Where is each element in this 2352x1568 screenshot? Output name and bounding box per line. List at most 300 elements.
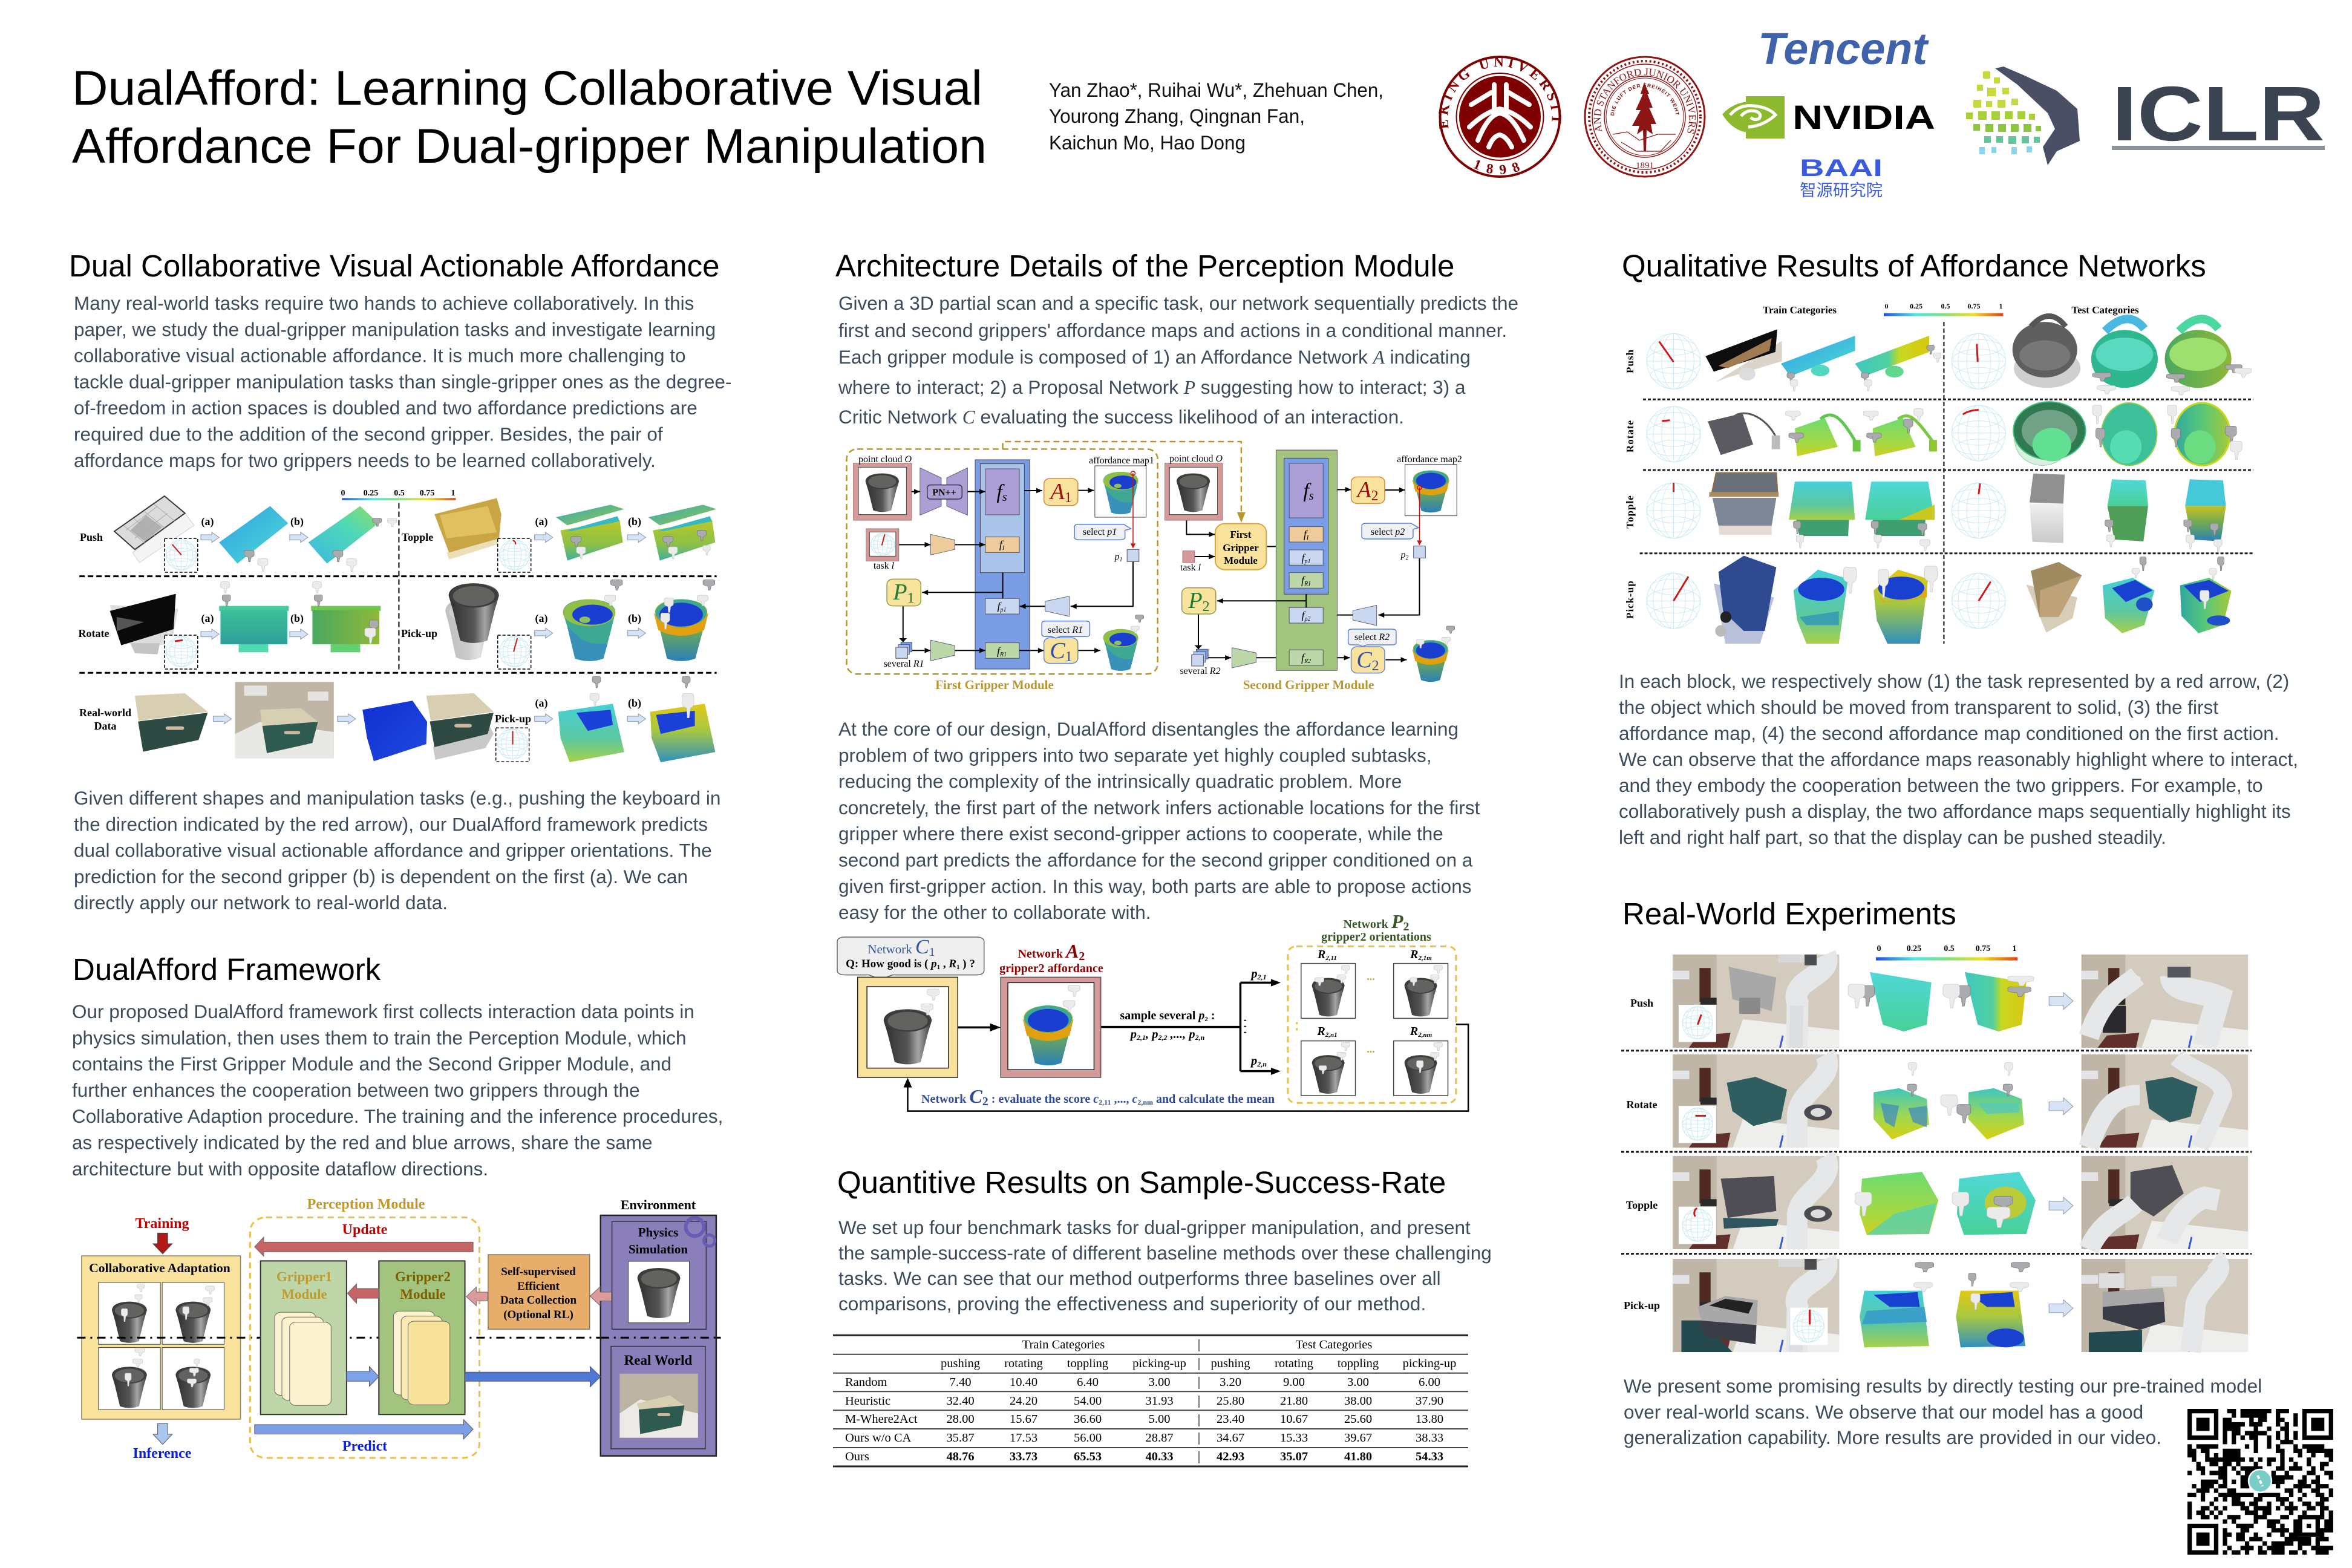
labels: architecture: task l	[1180, 563, 1201, 573]
table: results: 17.53	[1010, 1431, 1037, 1445]
panel: point cloud input second	[1165, 463, 1223, 520]
object: push row train	[1705, 329, 1782, 382]
row labels: (a)	[535, 612, 548, 625]
authors: Yan Zhao*, Ruihai Wu*, Zhehuan Chen,	[1049, 79, 1383, 101]
panel: first gripper result	[858, 977, 958, 1077]
labels: adaptation: R	[1318, 948, 1325, 961]
diagram labels: Environment	[621, 1197, 696, 1212]
labels: architecture: affordance map2	[1397, 454, 1462, 465]
labels: architecture: f	[1301, 552, 1305, 564]
object: router	[1708, 413, 1780, 455]
callout: select p1	[1074, 524, 1131, 540]
labels: architecture: p1	[1000, 607, 1007, 613]
arrow: predict	[255, 1420, 473, 1439]
labels: adaptation: 2,11	[1325, 955, 1337, 962]
diagram labels: Collaborative Adaptation	[89, 1261, 230, 1275]
labels: architecture: 2	[1371, 488, 1379, 504]
labels: architecture: point cloud O	[858, 454, 912, 465]
labels: adaptation: and calculate the mean	[1153, 1093, 1275, 1106]
labels: real-world: 1	[2012, 944, 2017, 953]
panel: environment	[601, 1215, 720, 1456]
heading: dual collaborative visual actionable affordance: Dual Collaborative Visual Actionable Affordance	[69, 249, 719, 283]
labels: architecture: Second Gripper Module	[1243, 678, 1374, 692]
table: results: 40.33	[1145, 1450, 1174, 1463]
labels: adaptation: 2	[982, 1095, 988, 1108]
diagram labels: Real World	[624, 1353, 693, 1368]
diagram labels: Training	[136, 1216, 189, 1232]
labels: adaptation: R	[1410, 948, 1419, 961]
table: results: Test Categories	[1296, 1338, 1372, 1351]
logo: Stanford University: DIE LUFT DER FREIHEIT WEHT	[1610, 83, 1679, 116]
photo: lab scene	[235, 682, 334, 758]
labels: architecture: Gripper	[1223, 542, 1259, 554]
text block: framework output: Given different shapes and manipulation tasks (e.g., pushing the keyboard in	[74, 787, 720, 809]
labels: architecture: C	[1050, 638, 1065, 664]
panel: point cloud input	[854, 463, 912, 520]
figure: qualitative results	[1624, 302, 2253, 644]
icon: storage box	[434, 498, 503, 560]
table: results: Ours	[845, 1450, 869, 1463]
labels: qualitative: Pick-up	[1624, 580, 1636, 619]
labels: architecture: f	[999, 538, 1002, 550]
authors: Kaichun Mo, Hao Dong	[1049, 132, 1246, 154]
labels: adaptation: ) ?	[960, 958, 975, 970]
table: results: Random	[845, 1376, 887, 1389]
text block: qualitative: We can observe that the affordance maps reasonably highlight where to interact,	[1619, 748, 2298, 770]
diagram labels: Predict	[342, 1439, 387, 1454]
QR code	[2187, 1411, 2333, 1552]
text block: framework output: prediction for the second gripper (b) is dependent on the first (a). We can	[74, 866, 688, 887]
labels: adaptation: Network A	[1018, 940, 1079, 962]
table: results: pushing	[1211, 1357, 1250, 1370]
arrow: predict small	[347, 1367, 379, 1387]
labels: adaptation: 2,nm	[1137, 1098, 1153, 1106]
table: results: 6.40	[1077, 1376, 1099, 1389]
labels: adaptation: : evaluate the score	[988, 1093, 1093, 1106]
text block: architecture: where to interact; 2) a Proposal Network P suggesting how to interact; 3) a	[838, 376, 1466, 398]
labels: adaptation: , p	[1145, 1028, 1158, 1041]
labels: adaptation: 2,n1	[1325, 1031, 1338, 1039]
panel: task input	[866, 529, 899, 561]
text block: framework: Collaborative Adaption procedure. The training and the inference procedures,	[72, 1105, 723, 1127]
labels: real-world: 0.75	[1976, 944, 1990, 953]
table: results: 37.90	[1416, 1394, 1443, 1408]
table: results: 42.93	[1217, 1450, 1244, 1463]
table: results: 54.00	[1074, 1394, 1102, 1408]
table: results: 38.00	[1344, 1394, 1372, 1408]
labels: qualitative	[1624, 302, 2139, 619]
labels: adaptation: c	[1132, 1093, 1137, 1106]
table: results: toppling	[1338, 1357, 1379, 1370]
labels: architecture: select p2	[1371, 527, 1405, 537]
labels: architecture: f	[997, 645, 1000, 657]
panel: C2	[1351, 647, 1385, 673]
labels: architecture: 1	[1119, 557, 1123, 563]
labels: qualitative: 0	[1885, 302, 1889, 310]
labels: architecture: f	[1303, 480, 1309, 502]
logo: Tencent: Tencent	[1758, 24, 1929, 74]
icon: box with transparent	[426, 693, 494, 760]
labels: architecture: First	[1230, 529, 1252, 540]
text block: introduction	[74, 292, 731, 471]
text block: framework output: directly apply our network to real-world data.	[74, 892, 448, 913]
table: results: 23.40	[1217, 1413, 1244, 1426]
table: results: 13.80	[1416, 1413, 1443, 1426]
table: results	[833, 1335, 1468, 1466]
labels: architecture: I	[1002, 545, 1005, 552]
labels: real-world: Pick-up	[1624, 1299, 1660, 1312]
text block: introduction: paper, we study the dual-gripper manipulation tasks and investigate learning	[74, 318, 716, 340]
labels: architecture: 1	[1065, 490, 1072, 506]
object: pc tower	[2030, 474, 2065, 543]
logo: BAAI: BAAI	[1800, 155, 1883, 181]
row labels: (a)	[201, 612, 214, 625]
table: results: Train Categories	[1022, 1338, 1105, 1351]
labels: qualitative: 1	[1999, 302, 2002, 310]
labels: qualitative: Test Categories	[2071, 304, 2139, 316]
panel: P1	[887, 579, 921, 606]
labels: adaptation: 2	[1079, 950, 1085, 963]
labels: adaptation: sample several p	[1120, 1009, 1204, 1022]
table: results: rotating	[1004, 1357, 1043, 1370]
heading: qualitative results: Qualitative Results of Affordance Networks	[1622, 249, 2206, 283]
labels: adaptation: p	[1131, 1028, 1137, 1041]
table: results: 34.67	[1217, 1431, 1244, 1445]
arrow: update	[255, 1237, 473, 1256]
table: results: 3.00	[1347, 1376, 1369, 1389]
labels: adaptation: 2,1m	[1418, 955, 1432, 962]
callout: network C1	[837, 937, 984, 979]
labels: architecture: R1	[999, 652, 1007, 658]
labels: architecture: s	[1309, 489, 1314, 503]
text block: introduction: tackle dual-gripper manipulation tasks than single-gripper ones as the degree-	[74, 371, 731, 393]
table: results: rotating	[1275, 1357, 1313, 1370]
text block: framework	[72, 1001, 723, 1180]
figure: framework diagram	[77, 1197, 720, 1462]
labels: real-world	[1624, 944, 2017, 1312]
labels: architecture: R1	[1304, 581, 1311, 587]
labels: architecture: First Gripper Module	[935, 678, 1054, 692]
labels: architecture: 1	[907, 590, 915, 606]
text block: design: gripper where there exist second-gripper actions to cooperate, while the	[838, 823, 1443, 844]
figure: collaborative adaptation procedure	[837, 910, 1468, 1111]
labels: adaptation: 1	[929, 946, 935, 959]
row labels: (a)	[535, 515, 548, 528]
labels: architecture: p	[1114, 552, 1119, 562]
callout: select R2	[1348, 629, 1396, 647]
labels: architecture: I	[1306, 535, 1309, 541]
heading: quantitative results: Quantitive Results on Sample-Success-Rate	[837, 1165, 1446, 1200]
labels: architecture: A	[1357, 477, 1371, 503]
text block: architecture: Each gripper module is composed of 1) an Affordance Network A indicating	[838, 346, 1471, 368]
table: results: 15.67	[1010, 1413, 1037, 1426]
text block: framework: as respectively indicated by the red and blue arrows, share the same	[72, 1131, 653, 1153]
logo: Stanford University: 1891	[1636, 161, 1654, 171]
colorbar labels	[341, 489, 455, 498]
row labels: Data	[94, 720, 116, 732]
table: results: Ours w/o CA	[845, 1431, 912, 1445]
labels: real-world: 0	[1877, 944, 1881, 953]
text block: qualitative: In each block, we respectively show (1) the task represented by a red arrow, (2)	[1619, 670, 2289, 692]
figure: real-world experiments	[1621, 944, 2252, 1352]
labels: architecture: p2	[1304, 616, 1311, 622]
table: results: 10.40	[1010, 1376, 1037, 1389]
labels: real-world: 0.25	[1907, 944, 1921, 953]
diagram labels: Efficient	[517, 1280, 560, 1293]
diagram labels: Gripper2	[395, 1269, 451, 1284]
labels: architecture: f	[1304, 528, 1307, 540]
labels: adaptation: p	[1251, 967, 1258, 981]
table: results: 36.60	[1074, 1413, 1102, 1426]
labels: real-world: Rotate	[1627, 1099, 1657, 1111]
arrow: predict to world	[465, 1367, 601, 1387]
panel: gripper 2	[379, 1261, 465, 1414]
panel: second gripper encoder	[1276, 450, 1337, 670]
labels: adaptation: gripper2 orientations	[1321, 930, 1431, 944]
table: results: 5.00	[1149, 1413, 1170, 1426]
text block: introduction: collaborative visual actionable affordance. It is much more challenging to	[74, 345, 686, 367]
labels: qualitative: Train Categories	[1763, 304, 1837, 316]
labels: adaptation: 2,1	[1136, 1033, 1146, 1042]
text block: qualitative: the object which should be moved from transparent to solid, (3) the first	[1619, 696, 2218, 718]
heading: DualAfford framework: DualAfford Framework	[73, 952, 381, 987]
text block: quantitative: the sample-success-rate of different baseline methods over these challenging	[838, 1242, 1492, 1264]
labels: architecture: affordance map1	[1089, 456, 1154, 466]
authors	[1049, 79, 1383, 154]
table: results: picking-up	[1403, 1357, 1456, 1370]
text block: introduction: required due to the addition of the second gripper. Besides, the pair of	[74, 423, 663, 445]
table: results: 6.00	[1419, 1376, 1440, 1389]
text block: quantitative: tasks. We can see that our method outperforms three baselines over all	[838, 1267, 1441, 1289]
table: results: 38.33	[1416, 1431, 1443, 1445]
labels: adaptation: 2,11	[1099, 1098, 1111, 1106]
text block: qualitative: left and right half part, so that the display can be pushed steadily.	[1619, 826, 2166, 848]
labels: architecture: A	[1050, 479, 1065, 505]
table: results: 33.73	[1010, 1450, 1037, 1463]
labels: architecture: 2	[1406, 555, 1408, 561]
object: basket	[2013, 316, 2080, 388]
panel: gripper 2 orientations	[1288, 946, 1456, 1103]
table: results: 48.76	[946, 1450, 975, 1463]
labels: architecture: several R1	[883, 659, 924, 669]
row labels: (a)	[535, 697, 548, 710]
labels: architecture: f	[1301, 609, 1305, 621]
panel: A2	[1351, 477, 1385, 503]
row labels: (b)	[628, 697, 641, 710]
labels: adaptation: 2,2	[1157, 1033, 1167, 1042]
row labels: Rotate	[79, 627, 109, 639]
labels: adaptation: :	[1208, 1009, 1215, 1022]
text block: framework: architecture but with opposite dataflow directions.	[72, 1158, 488, 1180]
text block: framework: Our proposed DualAfford framework first collects interaction data points in	[72, 1001, 694, 1022]
diagram labels: Module	[400, 1287, 446, 1302]
text block: framework output: the direction indicated by the red arrow), our DualAfford framework predicts	[74, 813, 708, 835]
table: results: toppling	[1067, 1357, 1108, 1370]
text block: framework output	[74, 787, 720, 913]
callout: select R1	[1042, 621, 1089, 638]
diagram labels: Simulation	[629, 1242, 688, 1256]
row labels: (b)	[290, 515, 304, 528]
labels: adaptation: ...	[1367, 1043, 1375, 1055]
text block: design: given first-gripper action. In this way, both parts are able to propose actions	[838, 875, 1471, 897]
object: trash bin	[1714, 556, 1776, 644]
labels: architecture: select R2	[1354, 632, 1390, 642]
table: results: 25.80	[1217, 1394, 1244, 1408]
text block: quantitative	[838, 1217, 1492, 1315]
labels: architecture	[858, 454, 1462, 692]
diagram labels: Gripper1	[276, 1269, 332, 1284]
table: results: Heuristic	[845, 1394, 890, 1408]
logo: BAAI: 智源研究院	[1800, 181, 1883, 200]
table: results: pushing	[941, 1357, 980, 1370]
table: results: 41.80	[1344, 1450, 1372, 1463]
text block: design: problem of two grippers into two separate yet highly coupled subtasks,	[838, 744, 1432, 766]
logo: NVIDIA	[1722, 96, 1935, 139]
labels: architecture: R2	[1304, 658, 1311, 665]
object: mesh basket	[2013, 402, 2086, 465]
row labels: Pick-up	[495, 713, 531, 725]
row: pick-up	[1673, 1259, 2248, 1352]
labels: adaptation: Q: How good is ( p	[846, 958, 937, 970]
text block: design	[838, 718, 1480, 923]
text block: qualitative: and they embody the cooperation between the two grippers. For example, to	[1619, 774, 2263, 796]
row: push	[1673, 955, 2248, 1048]
text block: architecture: Critic Network C evaluating the success likelihood of an interaction.	[838, 406, 1404, 428]
row labels	[79, 515, 641, 732]
text block: quantitative: comparisons, proving the effectiveness and superiority of our method.	[838, 1293, 1426, 1315]
diagram labels: Inference	[133, 1446, 192, 1462]
labels: architecture: C	[1356, 647, 1372, 673]
table: results: 56.00	[1074, 1431, 1102, 1445]
labels: adaptation: 2,nm	[1417, 1031, 1432, 1039]
icon: keyboard	[114, 496, 194, 563]
labels: adaptation: p	[1251, 1054, 1257, 1068]
labels: real-world: 0.5	[1944, 944, 1955, 953]
text block: introduction: Many real-world tasks require two hands to achieve collaboratively. In this	[74, 292, 694, 314]
row labels: (b)	[628, 515, 641, 528]
figure: perception module architecture	[846, 442, 1462, 692]
labels: architecture: PN++	[932, 488, 956, 498]
labels: adaptation	[846, 910, 1432, 1108]
diagram labels: Self-supervised	[501, 1266, 576, 1278]
diagram labels: Module	[281, 1287, 327, 1302]
labels: adaptation: 2	[1204, 1016, 1208, 1023]
diagram labels: Update	[342, 1222, 388, 1238]
row labels: Topple	[402, 531, 433, 543]
labels: adaptation: ,	[940, 958, 949, 970]
labels: architecture: f	[996, 481, 1002, 503]
text block: design: At the core of our design, DualAfford disentangles the affordance learning	[838, 718, 1459, 740]
logo: Peking University	[1439, 56, 1561, 178]
panel: collaborative adaptation	[82, 1256, 241, 1419]
labels: adaptation: 2	[1403, 920, 1409, 933]
figure: task examples	[79, 489, 717, 762]
labels: architecture: point cloud O	[1169, 454, 1223, 464]
labels: adaptation: Network C	[921, 1085, 982, 1107]
diagram labels	[89, 1197, 696, 1462]
row: topple	[1673, 1156, 2248, 1249]
labels: architecture: p1	[1304, 558, 1311, 565]
text block: architecture	[838, 292, 1518, 428]
table: results: 28.00	[946, 1413, 975, 1426]
panel: first gripper dashed	[846, 449, 1158, 674]
table: results: picking-up	[1132, 1357, 1186, 1370]
text block: real-world: We present some promising results by directly testing our pre-trained model	[1624, 1375, 2262, 1397]
text block: quantitative: We set up four benchmark tasks for dual-gripper manipulation, and present	[838, 1217, 1471, 1238]
photo: real world scene	[619, 1374, 698, 1438]
labels: adaptation: c	[1093, 1093, 1099, 1106]
text block: qualitative: collaboratively push a display, the two affordance maps sequentially highlight its	[1619, 800, 2291, 822]
table: results: 21.80	[1280, 1394, 1308, 1408]
logo: ICLR: ICLR	[2112, 71, 2325, 157]
table: results: 39.67	[1344, 1431, 1372, 1445]
panel: P2	[1182, 588, 1216, 614]
logo: Stanford University	[1584, 56, 1706, 178]
table: results: 28.87	[1145, 1431, 1174, 1445]
labels: qualitative: 0.75	[1967, 302, 1981, 310]
labels: adaptation: ...	[1367, 970, 1375, 982]
table: results: 35.07	[1280, 1450, 1308, 1463]
logo: Peking University: 1898	[1474, 160, 1520, 174]
object: chest	[1709, 473, 1779, 535]
authors: Yourong Zhang, Qingnan Fan,	[1049, 105, 1305, 127]
labels: adaptation: ,...,	[1111, 1093, 1132, 1106]
labels: architecture: f	[997, 600, 1001, 612]
labels: real-world: Push	[1630, 997, 1653, 1009]
heading: real-world experiments: Real-World Experiments	[1622, 897, 1956, 931]
text block: design: easy for the other to collaborate with.	[838, 901, 1151, 923]
labels: architecture: select R1	[1048, 625, 1083, 635]
logo: NVIDIA: NVIDIA	[1792, 98, 1935, 136]
labels: adaptation: Network P	[1344, 910, 1403, 932]
icon: real storage box	[135, 693, 207, 752]
panel: gripper 1	[261, 1261, 347, 1414]
text block: framework: contains the First Gripper Module and the Second Gripper Module, and	[72, 1053, 671, 1075]
text block: design: second part predicts the affordance for the second gripper conditioned on a	[838, 849, 1473, 871]
panel: C1	[1044, 638, 1078, 664]
labels: architecture: Module	[1224, 555, 1258, 566]
labels: adaptation: R	[1410, 1025, 1418, 1038]
text block: design: reducing the complexity of the intrinsically quadratic problem. More	[838, 771, 1402, 792]
labels: qualitative: Topple	[1624, 495, 1636, 529]
labels: adaptation: 1	[956, 964, 960, 971]
row labels: (b)	[628, 612, 641, 625]
diagram labels: Data Collection	[500, 1294, 577, 1307]
panel: first gripper module	[1215, 524, 1266, 570]
text block: architecture: Given a 3D partial scan and a specific task, our network sequentially predicts the	[838, 292, 1518, 314]
table: results: 31.93	[1145, 1394, 1174, 1408]
text block: framework output: dual collaborative visual actionable affordance and gripper orientations. The	[74, 840, 712, 861]
logo: pixel head	[1966, 67, 2080, 165]
labels: architecture: f	[1301, 574, 1304, 586]
text block: design: concretely, the first part of the network infers actionable locations for the first	[838, 797, 1480, 818]
labels: qualitative: Push	[1624, 349, 1636, 373]
labels: architecture: several R2	[1180, 666, 1221, 676]
panel: A1	[1044, 479, 1078, 506]
colorbar labels: 0.5	[394, 489, 405, 498]
labels: architecture: 2	[1372, 658, 1379, 674]
table: results: 32.40	[946, 1394, 975, 1408]
diagram labels: Perception Module	[307, 1197, 425, 1212]
panel: shared encoder	[975, 460, 1030, 669]
panel: affordance map 2	[1405, 465, 1457, 516]
text block: real-world	[1624, 1375, 2262, 1448]
heading: architecture details: Architecture Details of the Perception Module	[835, 249, 1454, 283]
colorbar labels: 0	[341, 489, 345, 498]
labels: architecture: s	[1002, 491, 1007, 504]
table: results: 9.00	[1283, 1376, 1305, 1389]
labels: architecture: p	[1401, 550, 1406, 560]
